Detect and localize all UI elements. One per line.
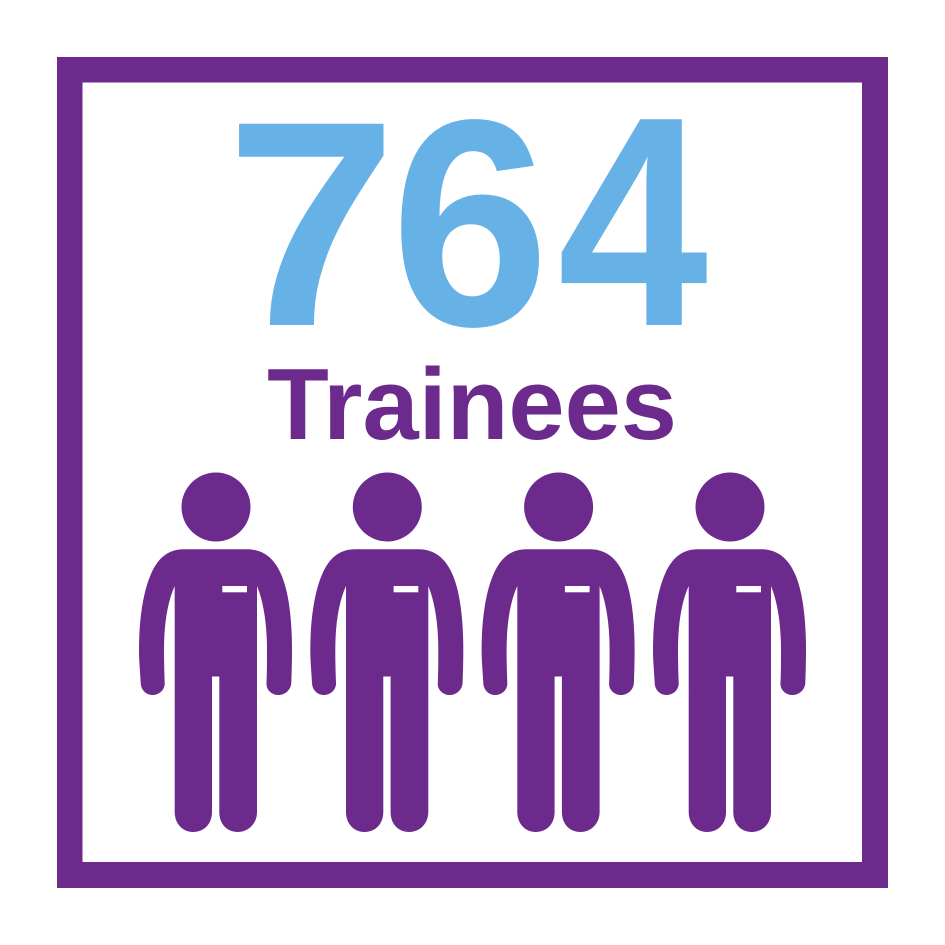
- label Trainees: Trainees: [267, 349, 677, 461]
- number 764: [226, 55, 710, 389]
- number 764: 6: [391, 60, 549, 388]
- number 764: 4: [558, 55, 710, 389]
- icon: person 2: [310, 472, 463, 832]
- icon: person 3: [482, 472, 635, 832]
- icon: person 4: [653, 472, 806, 832]
- number 764: 7: [226, 60, 397, 387]
- icon: person 1: [139, 472, 292, 832]
- purple frame: [57, 57, 888, 888]
